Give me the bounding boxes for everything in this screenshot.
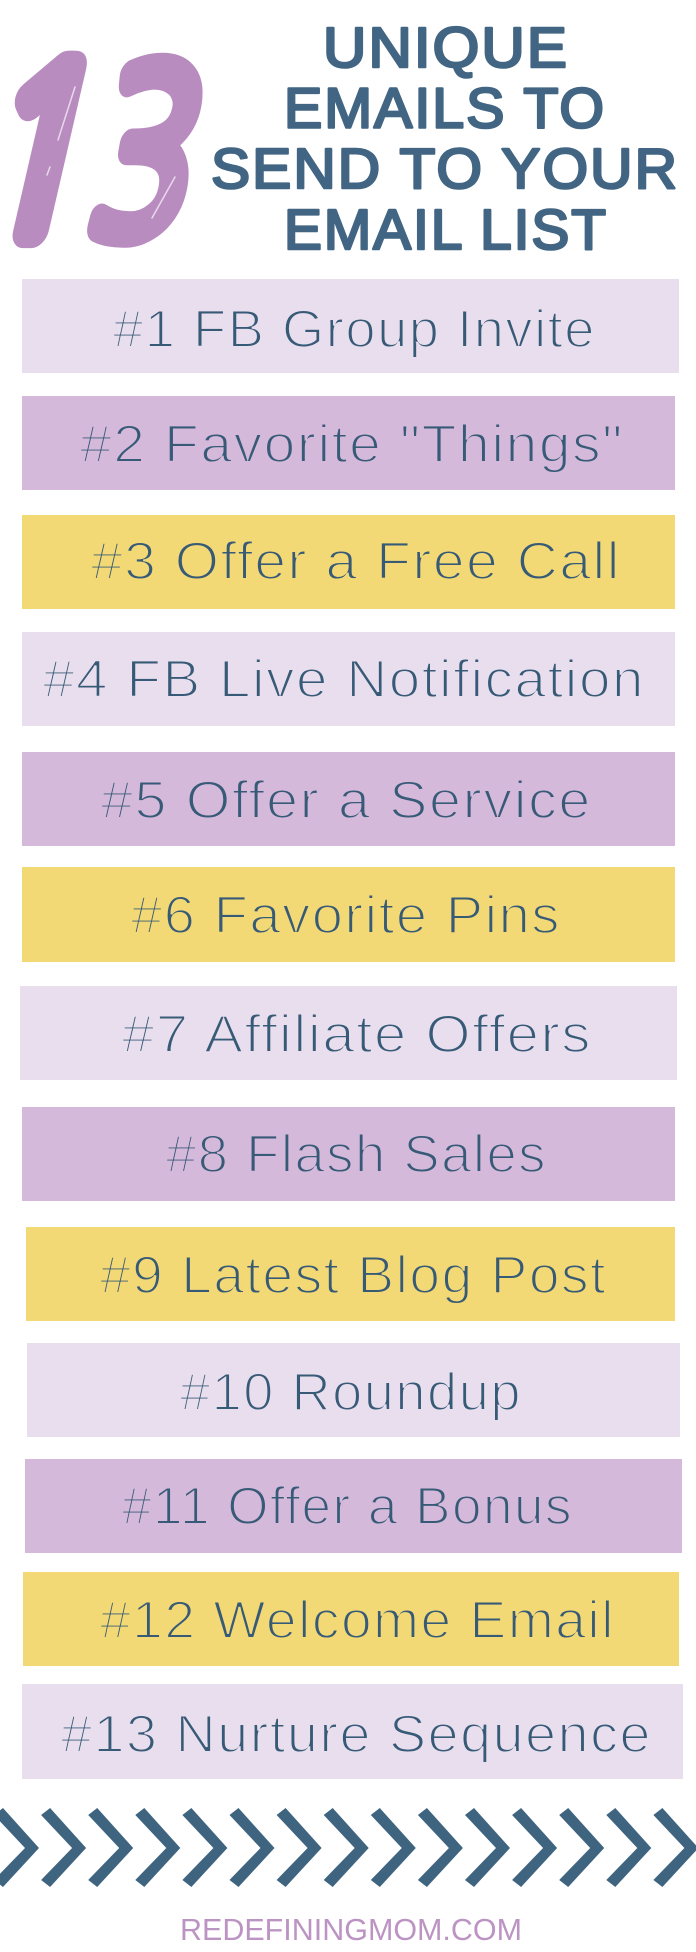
item 5	[22, 752, 675, 846]
title: EMAILS TO	[284, 76, 606, 140]
item 10: #10 Roundup	[180, 1363, 522, 1422]
item 12	[23, 1572, 679, 1666]
item 10	[27, 1343, 680, 1437]
big number 13	[0, 40, 219, 267]
item 9: #9 Latest Blog Post	[100, 1246, 607, 1305]
item 2	[22, 396, 675, 490]
item 9	[26, 1227, 675, 1321]
chevron arrow row	[0, 1808, 696, 1887]
item 5: #5 Offer a Service	[101, 771, 592, 830]
item 4: #4 FB Live Notification	[43, 650, 645, 709]
item 8: #8 Flash Sales	[166, 1125, 547, 1184]
item 3	[22, 515, 675, 609]
item 7	[20, 986, 677, 1080]
title	[211, 16, 679, 262]
title: UNIQUE	[323, 16, 569, 80]
big number 13: 3	[78, 40, 219, 267]
item 7: #7 Affiliate Offers	[122, 1005, 592, 1064]
title: EMAIL LIST	[284, 198, 608, 262]
item 3: #3 Offer a Free Call	[91, 532, 621, 591]
item 6	[22, 867, 675, 962]
item 4	[22, 632, 675, 726]
item 11: #11 Offer a Bonus	[122, 1477, 573, 1536]
footer website: REDEFININGMOM.COM	[180, 1912, 522, 1947]
item 1	[22, 279, 679, 373]
item 2: #2 Favorite "Things"	[80, 415, 624, 474]
item 1: #1 FB Group Invite	[113, 300, 596, 359]
item 6: #6 Favorite Pins	[131, 886, 561, 945]
title: SEND TO YOUR	[211, 137, 679, 201]
item 11	[25, 1459, 682, 1553]
item 13: #13 Nurture Sequence	[61, 1705, 652, 1764]
item 13	[22, 1684, 683, 1779]
item 12: #12 Welcome Email	[100, 1591, 615, 1650]
item 8	[22, 1107, 675, 1201]
